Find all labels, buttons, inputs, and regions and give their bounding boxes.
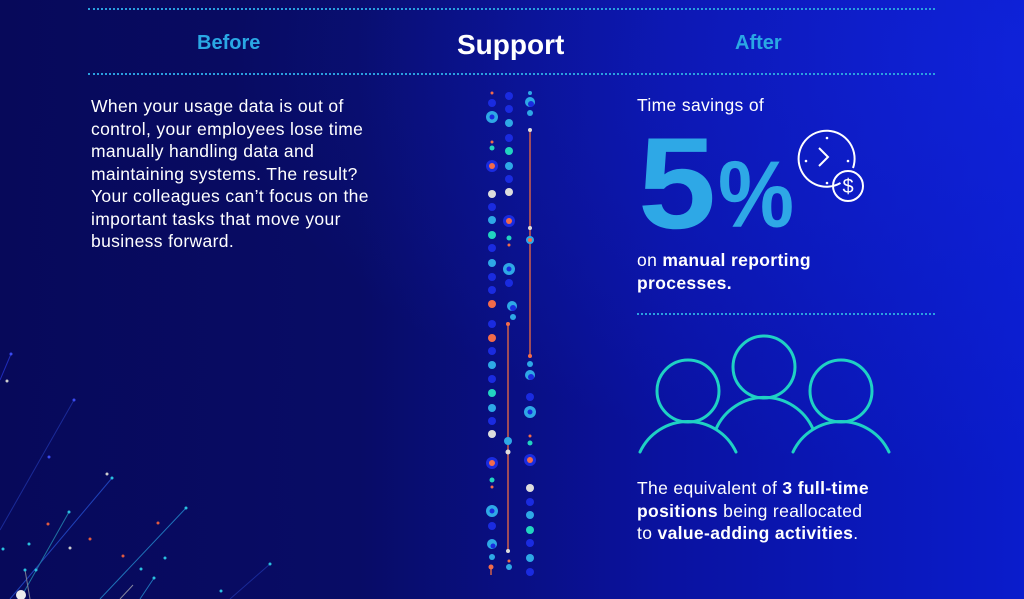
text: full-time positions: The equivalent of 3 full-time xyxy=(637,478,869,498)
text: before description xyxy=(91,96,369,251)
text: before description: Your colleagues can’t focus on the xyxy=(91,186,369,206)
text: before description: control, your employees lose time xyxy=(91,118,363,138)
chart: data dot columns xyxy=(486,91,536,576)
icon: clock with dollar xyxy=(798,130,864,202)
heading: Before: Before xyxy=(197,32,260,54)
stat: 5%: 5 xyxy=(638,110,716,256)
heading: After: After xyxy=(735,32,782,54)
text: time savings label: Time savings of xyxy=(637,95,764,115)
text: manual reporting: processes. xyxy=(637,272,732,292)
icon: three people xyxy=(638,334,890,454)
heading: Support: Support xyxy=(457,29,564,60)
text: manual reporting: on manual reporting xyxy=(637,250,811,270)
stat: 5%: % xyxy=(718,142,794,248)
text: full-time positions: positions being reallocated xyxy=(637,500,862,520)
text: before description: business forward. xyxy=(91,231,234,251)
text: full-time positions: to value-adding activities. xyxy=(637,523,858,543)
streaks decoration xyxy=(0,352,272,599)
stat: 5% xyxy=(638,110,794,256)
icon: clock with dollar: $ xyxy=(842,176,854,198)
text: manual reporting xyxy=(637,250,811,292)
text: before description: important tasks that move your xyxy=(91,208,341,228)
text: before description: maintaining systems. The result? xyxy=(91,164,358,184)
text: full-time positions xyxy=(637,478,869,543)
text: before description: When your usage data is out of xyxy=(91,96,344,116)
text: before description: manually handling data and xyxy=(91,141,314,161)
